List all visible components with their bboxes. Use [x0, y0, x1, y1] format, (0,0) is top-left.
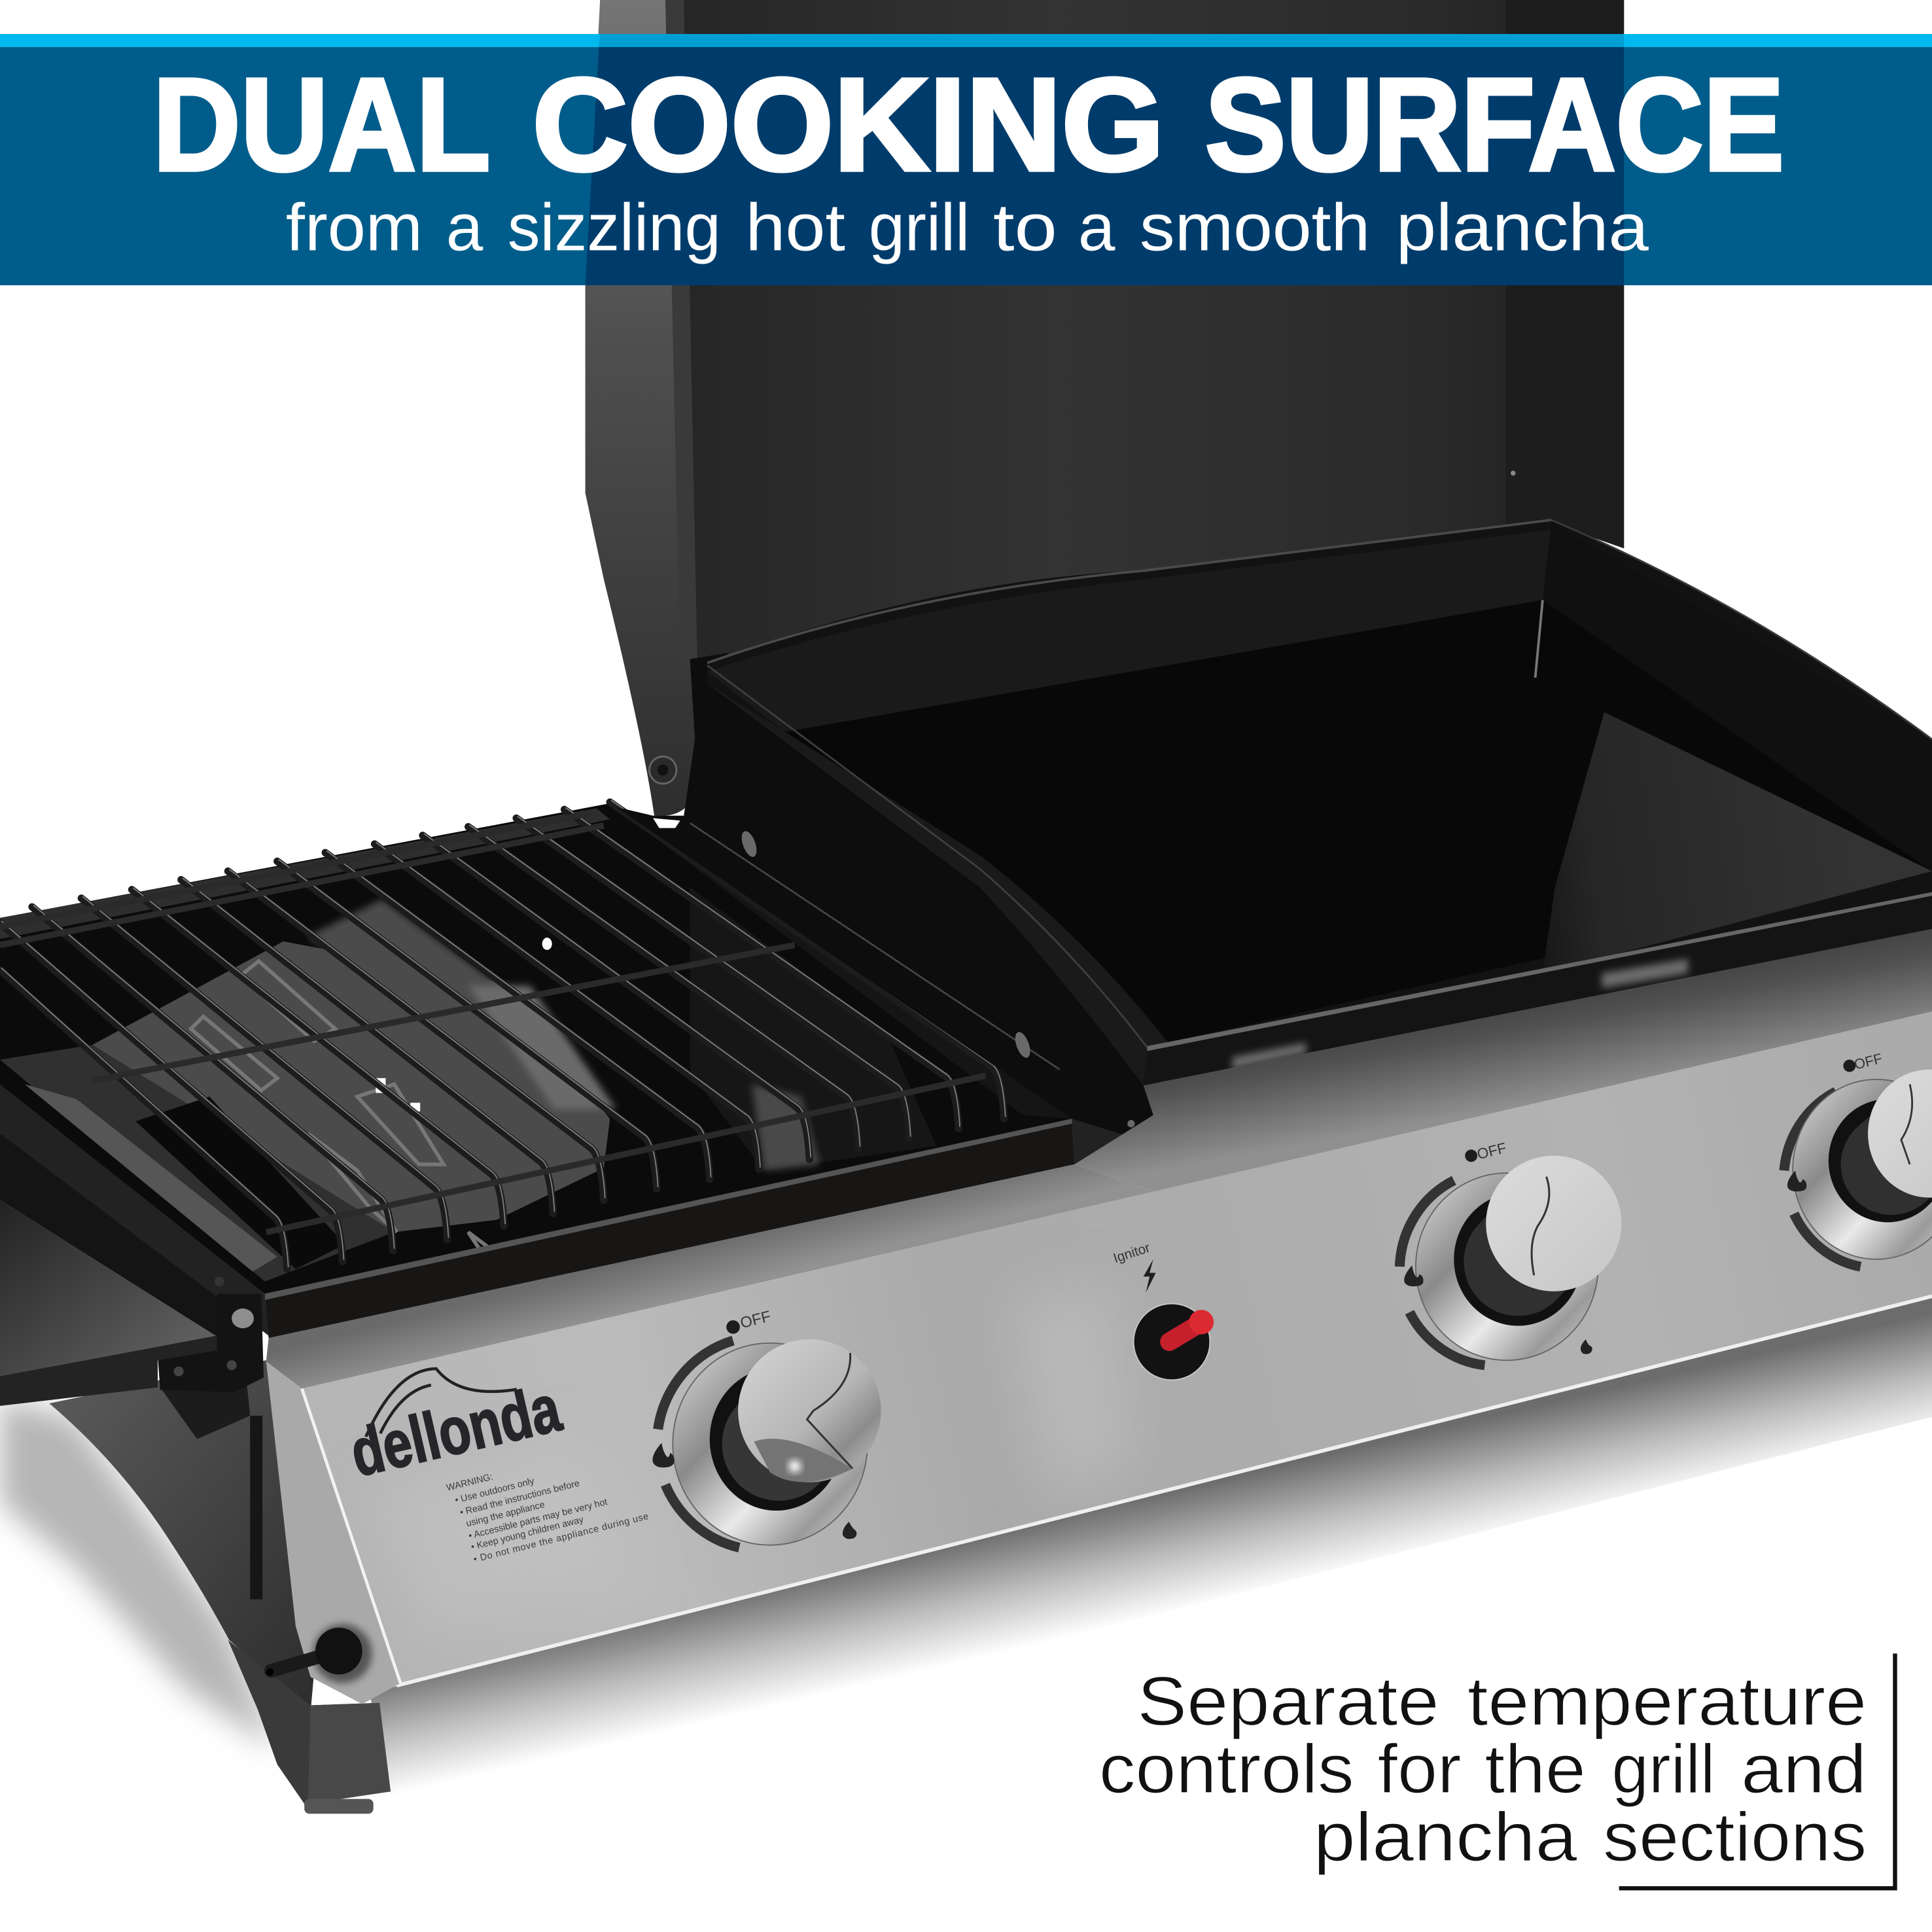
caption text: grill: [1611, 1731, 1715, 1808]
panel front face: [302, 1011, 1932, 1685]
knob 2 cap: [1486, 1156, 1621, 1291]
caption text: for: [1378, 1731, 1462, 1808]
plancha front rim: [1144, 892, 1932, 1085]
warning label: WARNING:: [446, 1472, 494, 1494]
caption corner bracket: [1619, 1653, 1895, 1888]
grate rods: [0, 802, 1004, 1269]
banner subtitle: to: [993, 190, 1057, 264]
plancha corner glint: [1536, 600, 1543, 678]
body top strip right: [1074, 929, 1932, 1191]
banner subtitle: from: [286, 190, 423, 264]
control panel: [266, 1011, 1932, 1704]
knob 3 flame high: [1787, 1170, 1806, 1191]
warning label: • Read the instructions before: [459, 1478, 581, 1518]
lid inner surface: [678, 0, 1624, 665]
warning label: • Accessible parts may be very hot: [468, 1497, 608, 1541]
side shelf: [0, 1134, 264, 1380]
ignitor button: [1112, 1240, 1214, 1380]
knob 2 bezel opening: [1454, 1193, 1582, 1326]
caption text: [1099, 1664, 1867, 1876]
knob 2 scale arcs: [1399, 1180, 1484, 1365]
caption: [1099, 1653, 1895, 1888]
open lid: [586, 0, 1624, 816]
warning label: • Use outdoors only: [454, 1476, 536, 1505]
banner title: COOKING: [533, 51, 1165, 198]
knob 3 off mark: OFF: [1852, 1050, 1884, 1073]
tray left outer wall: [0, 1070, 269, 1335]
banner subtitle: hot: [745, 190, 845, 264]
banner subtitle: [286, 190, 1649, 264]
ignitor bolt icon: [1144, 1259, 1156, 1293]
banner subtitle: smooth: [1140, 190, 1370, 264]
warning label: [446, 1472, 650, 1565]
plancha back wall: [707, 530, 1551, 732]
knob 1 off mark: OFF: [739, 1307, 773, 1331]
warning label: using the appliance: [465, 1500, 546, 1529]
lid hinge bolt: [649, 756, 676, 784]
knob 2 bezel: [1416, 1173, 1598, 1360]
ignitor base: [1134, 1304, 1210, 1380]
panel light streaks: [370, 1282, 1134, 1626]
burner slots: [191, 961, 518, 1269]
knob 3: plancha: [1784, 1050, 1932, 1267]
knob 1 flame low: [843, 1522, 856, 1539]
ignitor red plunger: [1169, 1324, 1200, 1342]
plancha latch: [1843, 947, 1932, 981]
left glossy inner strip: [25, 1084, 277, 1272]
ground shadow: [0, 1296, 1932, 1809]
warning label: • Keep young children away: [470, 1515, 586, 1553]
plancha floor: [785, 600, 1932, 1042]
rod highlights: [1, 800, 1006, 1267]
warning label: • Do not move the appliance during use: [472, 1511, 650, 1565]
banner title: SURFACE: [1205, 51, 1784, 198]
banner subtitle: a: [446, 190, 483, 264]
logo swoosh: [354, 1351, 519, 1437]
lid right band: [1505, 0, 1624, 548]
banner subtitle: plancha: [1396, 190, 1649, 264]
caption text: and: [1741, 1731, 1867, 1808]
knob 3 bezel opening: [1829, 1099, 1932, 1222]
side support bracket: [49, 1360, 321, 1713]
foot: [228, 1640, 391, 1814]
top banner: [0, 34, 1932, 285]
knob 2 flame low: [1581, 1339, 1592, 1354]
plancha outer body: [707, 520, 1932, 1085]
grill tray: [0, 800, 1074, 1338]
hinge band between grill and plancha: [616, 653, 1158, 1165]
gas inlet nozzle: [266, 1624, 372, 1683]
knob 3 cap: [1868, 1070, 1932, 1198]
caption text: sections: [1603, 1799, 1867, 1876]
knob 1 cap: [738, 1339, 881, 1483]
knob 3 scale arcs: [1784, 1092, 1861, 1267]
lid dark inner rail: [665, 0, 697, 665]
caption text: the: [1484, 1731, 1586, 1808]
banner cyan stripe: [0, 34, 1932, 47]
corner bracket with bolts: [0, 1276, 264, 1406]
grate cross wires: [0, 813, 986, 1232]
plancha plate: [707, 520, 1932, 1085]
knob 3 knurled stem: [1891, 1136, 1925, 1165]
ignitor label: Ignitor: [1112, 1240, 1152, 1266]
tray interior: [0, 803, 1072, 1293]
back rim: [0, 808, 610, 939]
knob 2 flame high: [1404, 1265, 1424, 1286]
tray front wall: [265, 1119, 1074, 1338]
banner title: DUAL: [153, 51, 491, 198]
right rail: [610, 803, 1072, 1119]
banner subtitle: a: [1078, 190, 1115, 264]
small light gaps: [376, 938, 552, 1112]
knob 1 knurled stem: [779, 1417, 803, 1444]
caption text: Separate: [1137, 1664, 1439, 1740]
plancha left wall: [707, 684, 1168, 1085]
plancha glossy reflection: [1543, 712, 1932, 974]
logo wordmark: dellonda: [344, 1370, 568, 1490]
lid side frame: [586, 0, 702, 816]
brand logo: [338, 1343, 568, 1490]
knob 1 flame high: [652, 1443, 675, 1467]
body top strip left: [266, 1165, 1155, 1388]
glossy heat plate: [92, 941, 610, 1232]
knob 1: grill: [652, 1307, 881, 1547]
plancha back rim highlight: [707, 520, 1551, 663]
knob 1 off mark: [726, 1307, 773, 1334]
white gap by hinge: [653, 818, 680, 828]
caption text: plancha: [1314, 1799, 1577, 1876]
knob 1 bezel: [673, 1343, 868, 1545]
banner subtitle: grill: [869, 190, 970, 264]
knob 1 scale arcs: [658, 1341, 739, 1547]
banner blue band: [0, 47, 1932, 285]
panel bottom highlight: [396, 1296, 1932, 1685]
knob 2 off mark: OFF: [1475, 1140, 1508, 1163]
knob 1 bezel opening: [710, 1367, 843, 1511]
knob 2: plancha: [1399, 1140, 1621, 1365]
caption text: controls: [1099, 1731, 1354, 1808]
banner subtitle: sizzling: [508, 190, 721, 264]
hinge screws: [739, 829, 1135, 1127]
panel left side face: [266, 1361, 400, 1704]
plancha right wall: [1543, 523, 1932, 871]
caption text: temperature: [1467, 1664, 1867, 1740]
knob 3 bezel: [1793, 1080, 1932, 1259]
banner title: [153, 51, 1784, 198]
knob 2 knurled stem: [1518, 1227, 1550, 1261]
